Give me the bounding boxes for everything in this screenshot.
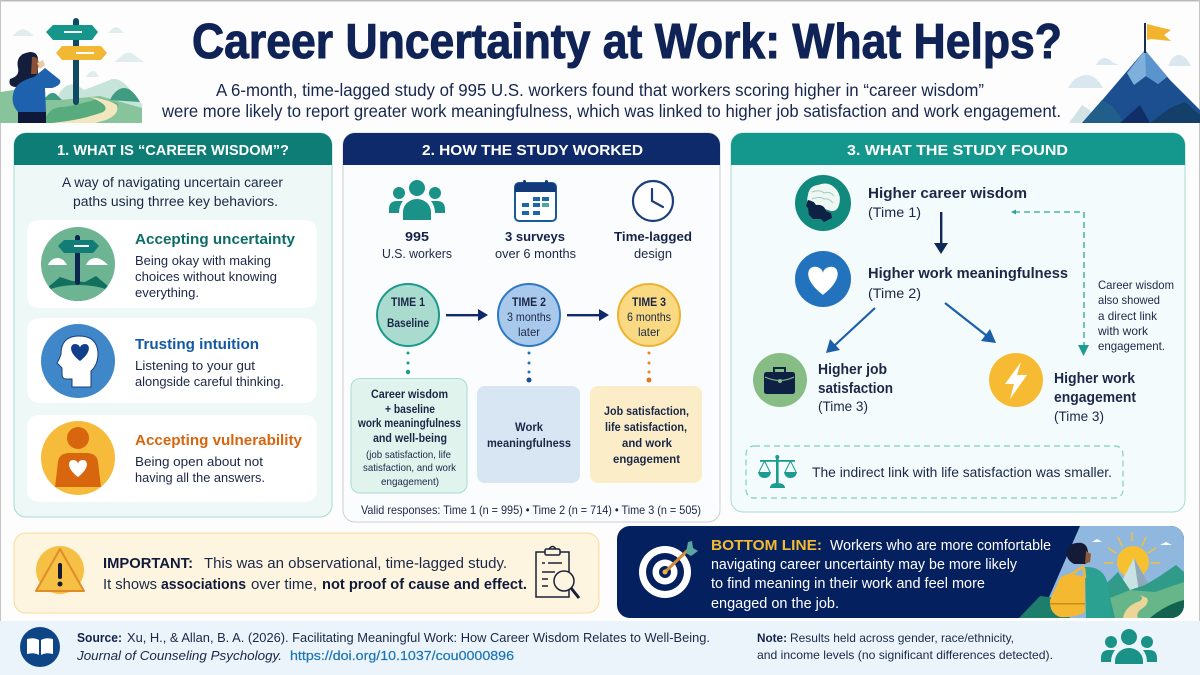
icon: scales: [758, 455, 797, 488]
panel 2: how the study worked: [343, 133, 720, 522]
note on subgroups: Results held across gender, race/ethnicity,: [790, 631, 1014, 645]
timeline: time 3: [618, 284, 680, 346]
important text: not proof of cause and effect.: [322, 576, 527, 593]
timeline: time 3: 6 months: [627, 310, 671, 324]
finding: work engagement: (Time 3): [1054, 408, 1104, 424]
icon: people: [389, 180, 445, 220]
box: time 1 measures: work meaningfulness: [357, 416, 461, 430]
trusting intuition text: Trusting intuition: [135, 336, 259, 353]
stat: 3 surveys: over 6 months: [495, 246, 576, 261]
finding: work engagement: Higher work: [1054, 371, 1136, 387]
icon: clipboard and magnifier: [536, 546, 579, 598]
card: trusting intuition: [27, 318, 317, 403]
source citation: https://doi.org/10.1037/cou0000896: [290, 648, 514, 663]
box: time 1 measures: (job satisfaction, life: [366, 449, 451, 461]
callout: important: [14, 533, 599, 613]
illustration: woman at signpost: [0, 18, 144, 123]
box: time 1 measures: satisfaction, and work: [363, 462, 457, 474]
finding: career wisdom: (Time 1): [868, 204, 921, 220]
callout: bottom line: [617, 526, 1184, 618]
source citation: Journal of Counseling Psychology.: [76, 648, 282, 663]
important text: IMPORTANT:: [103, 555, 193, 572]
finding: work meaningfulness: Higher work meaningfulness: [868, 265, 1068, 282]
timeline: time 2: TIME 2: [512, 295, 546, 309]
card: accepting uncertainty: [27, 220, 317, 315]
callout: life satisfaction: [746, 446, 1123, 498]
stat: 995 U.S. workers: [382, 180, 452, 261]
icon: head with heart: [41, 324, 115, 398]
signpost: [46, 18, 107, 105]
trusting intuition text: alongside careful thinking.: [135, 374, 284, 389]
hiker: [1050, 543, 1112, 618]
finding: career wisdom: [795, 175, 1027, 231]
panel 2 header: 2. HOW THE STUDY WORKED: [422, 142, 643, 159]
bottom line text: to find meaning in their work and feel more: [711, 576, 985, 592]
note on subgroups: and income levels (no significant differences detected).: [757, 648, 1053, 662]
icon: heart: [795, 251, 851, 307]
box: time 3 measures: and work: [622, 436, 672, 450]
panel 1: what is career wisdom: [14, 133, 332, 517]
accepting vulnerability text: [135, 432, 303, 485]
bottom line text: navigating career uncertainty may be more likely: [711, 557, 1018, 573]
accepting uncertainty text: choices without knowing: [135, 269, 277, 284]
box: time 1 measures: [351, 378, 467, 493]
icon: warning triangle: [36, 546, 84, 594]
accepting vulnerability text: Being open about not: [135, 454, 263, 469]
callout: life satisfaction: The indirect link with life satisfaction was smaller.: [812, 465, 1112, 480]
finding: work meaningfulness: [795, 251, 1068, 307]
illustration: hiker looking at mountain: [1019, 526, 1184, 618]
box: time 1 measures: Career wisdom: [371, 387, 448, 401]
accepting uncertainty text: Being okay with making: [135, 253, 271, 268]
subtitle: A 6-month, time-lagged study of 995 U.S. workers found that workers scoring higher in “career wisdom”: [216, 80, 984, 100]
finding: work engagement: engagement: [1054, 390, 1136, 406]
illustration: mountain with flag: [1068, 23, 1200, 123]
panel 1 intro: paths using thrree key behaviors.: [73, 194, 278, 209]
icon: people: [1101, 629, 1157, 664]
panel 3: what the study found: [731, 133, 1185, 512]
icon: brain and head: [795, 175, 851, 231]
box: time 2 measures: Work: [515, 420, 543, 434]
timeline: time 1: [377, 284, 439, 346]
timeline: time 2: later: [518, 325, 540, 339]
source citation: [76, 630, 710, 663]
finding: job satisfaction: [753, 353, 893, 414]
arrow: [446, 309, 488, 321]
panel 1 header: 1. WHAT IS “CAREER WISDOM”?: [57, 142, 289, 159]
icon: open book: [20, 627, 60, 667]
note on subgroups: Note:: [757, 631, 787, 645]
icon: lightning bolt: [989, 353, 1043, 407]
stat: 995 U.S. workers: U.S. workers: [382, 246, 452, 261]
source citation: Source:: [77, 630, 122, 645]
valid responses note: Valid responses: Time 1 (n = 995) • Time 2 (n = 714) • Time 3 (n = 505): [361, 503, 701, 517]
arrow: meaningfulness to engagement: [945, 303, 996, 343]
panel 1 intro: A way of navigating uncertain career: [62, 175, 283, 190]
box: time 3 measures: engagement: [613, 452, 680, 466]
arrow: [567, 309, 609, 321]
important text: This was an observational, time-lagged study.: [204, 555, 507, 572]
icon: target with arrow: [639, 541, 698, 598]
important text: It shows: [103, 576, 157, 593]
panel 1 header: [14, 133, 332, 165]
footer: [0, 621, 1200, 675]
accepting uncertainty text: [135, 231, 296, 300]
stat: 3 surveys: [495, 180, 576, 261]
trusting intuition text: [135, 336, 284, 389]
stat: time-lagged design: [614, 181, 692, 261]
note: direct link: with work: [1097, 324, 1149, 338]
accepting vulnerability text: having all the answers.: [135, 470, 265, 485]
bottom line text: BOTTOM LINE:: [711, 537, 822, 554]
stat: time-lagged design: design: [634, 246, 672, 261]
accepting uncertainty text: everything.: [135, 285, 199, 300]
note on subgroups: [757, 631, 1053, 662]
stat: 995 U.S. workers: 995: [405, 229, 429, 244]
trusting intuition text: Listening to your gut: [135, 358, 255, 373]
note: direct link: a direct link: [1098, 309, 1158, 323]
source citation: Xu, H., & Allan, B. A. (2026). Facilitating Meaningful Work: How Career Wisdom Relates to Well-Being.: [127, 630, 710, 645]
dashed arrow: direct link: [1011, 210, 1089, 356]
accepting uncertainty text: Accepting uncertainty: [135, 231, 296, 248]
finding: job satisfaction: Higher job: [818, 362, 887, 378]
box: time 1 measures: and well-being: [373, 431, 447, 445]
timeline: time 2: 3 months: [507, 310, 551, 324]
dotted connectors: [406, 352, 652, 382]
bottom line text: [711, 537, 1051, 612]
icon: clock: [633, 181, 673, 221]
icon: calendar: [515, 180, 556, 221]
note: direct link: engagement.: [1098, 339, 1165, 353]
note: direct link: also showed: [1098, 293, 1160, 307]
finding: career wisdom: Higher career wisdom: [868, 185, 1027, 202]
important text: associations: [161, 576, 246, 593]
timeline: time 1: TIME 1: [391, 295, 425, 309]
panel 3 header: [731, 133, 1185, 165]
timeline: time 1: Baseline: [387, 316, 429, 330]
important text: [103, 555, 527, 593]
subtitle: [161, 80, 1061, 121]
timeline: time 2: [498, 284, 560, 346]
box: time 1 measures: + baseline: [385, 402, 435, 416]
icon: person with heart: [41, 421, 115, 495]
note: direct link: [1097, 278, 1174, 353]
timeline: time 3: later: [638, 325, 660, 339]
bottom line text: engaged on the job.: [711, 596, 839, 612]
panel 3 header: 3. WHAT THE STUDY FOUND: [847, 142, 1068, 159]
arrow: meaningfulness to job satisfaction: [826, 308, 875, 353]
panel 2 header: [343, 133, 720, 165]
timeline: time 3: TIME 3: [632, 295, 666, 309]
bottom line text: Workers who are more comfortable: [830, 538, 1051, 554]
accepting vulnerability text: Accepting vulnerability: [135, 432, 303, 449]
panel 1 intro: [62, 175, 283, 209]
finding: work engagement: [989, 353, 1136, 424]
stat: 3 surveys: 3 surveys: [505, 229, 565, 244]
box: time 1 measures: engagement): [381, 476, 439, 488]
finding: work meaningfulness: (Time 2): [868, 285, 921, 301]
icon: signpost: [41, 227, 115, 301]
icon: briefcase: [753, 353, 807, 407]
box: time 3 measures: Job satisfaction,: [604, 404, 689, 418]
box: time 3 measures: life satisfaction,: [605, 420, 687, 434]
arrow: wisdom to meaningfulness: [934, 212, 948, 254]
note: direct link: Career wisdom: [1098, 278, 1174, 292]
card: accepting vulnerability: [27, 415, 317, 502]
finding: job satisfaction: (Time 3): [818, 398, 868, 414]
important text: over time,: [251, 576, 317, 593]
title: Career Uncertainty at Work: What Helps?: [192, 15, 1062, 69]
finding: job satisfaction: satisfaction: [818, 381, 893, 397]
subtitle: were more likely to report greater work meaningfulness, which was linked to higher job satisfaction and work engagement.: [161, 101, 1061, 121]
stat: time-lagged design: Time-lagged: [614, 229, 692, 244]
box: time 2 measures: [477, 386, 580, 483]
woman: [9, 52, 60, 123]
box: time 3 measures: [590, 386, 702, 483]
box: time 2 measures: meaningfulness: [487, 436, 571, 450]
